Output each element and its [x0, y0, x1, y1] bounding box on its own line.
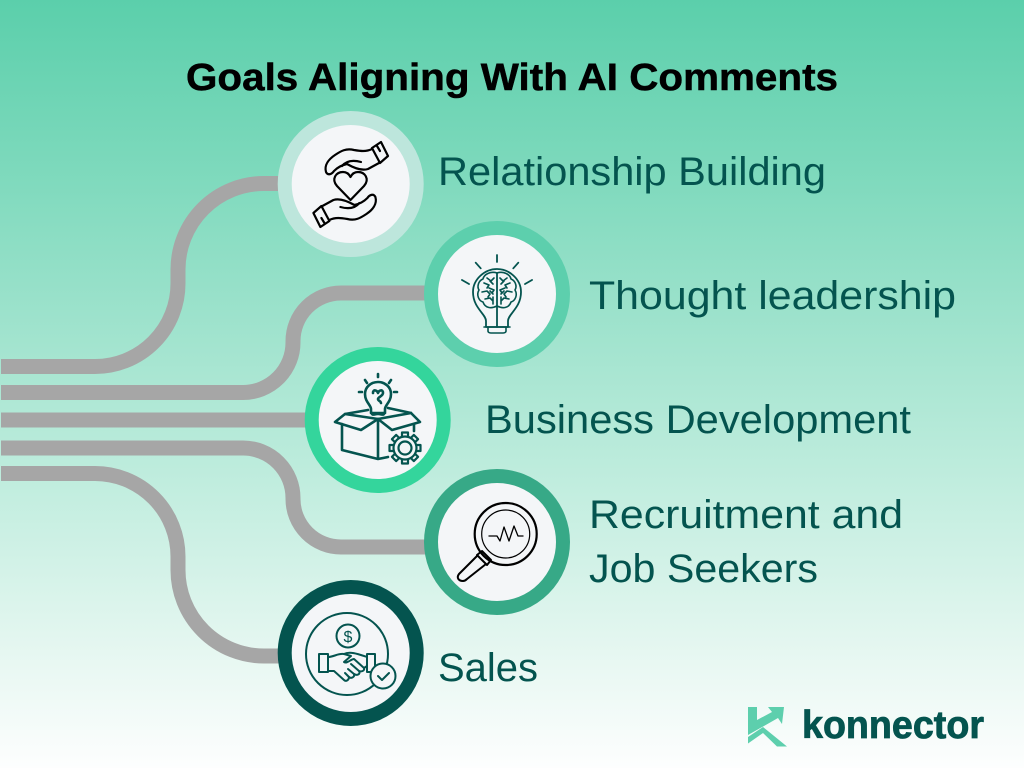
label: sales: Sales: [438, 646, 538, 690]
title: Goals Aligning With AI Comments: [186, 57, 838, 99]
icon: box with bulb: [335, 374, 420, 459]
node: sales: [285, 587, 417, 719]
icon: magnifier: [458, 503, 537, 581]
icon: brain in bulb: [462, 255, 532, 333]
label: business development: Business Development: [485, 398, 911, 442]
label: recruitment and job seekers: Recruitment and: [589, 493, 903, 537]
label: recruitment and job seekers: [589, 493, 903, 591]
icon: gear: [390, 432, 420, 464]
logo: konnector: [748, 704, 984, 747]
icon: hands and heart: [313, 142, 388, 227]
icon: logo mark: [748, 707, 787, 746]
icon: handshake deal: $: [344, 629, 353, 646]
node: recruitment and job seekers: [431, 476, 563, 608]
label: relationship building: Relationship Building: [438, 150, 826, 194]
node: business development: [312, 354, 444, 486]
wordmark: konnector: [802, 704, 984, 747]
node: thought leadership: [431, 228, 563, 360]
label: recruitment and job seekers: Job Seekers: [589, 547, 818, 591]
node: relationship building: [285, 118, 417, 250]
connector lines: [1, 184, 430, 656]
label: thought leadership: Thought leadership: [589, 274, 956, 318]
